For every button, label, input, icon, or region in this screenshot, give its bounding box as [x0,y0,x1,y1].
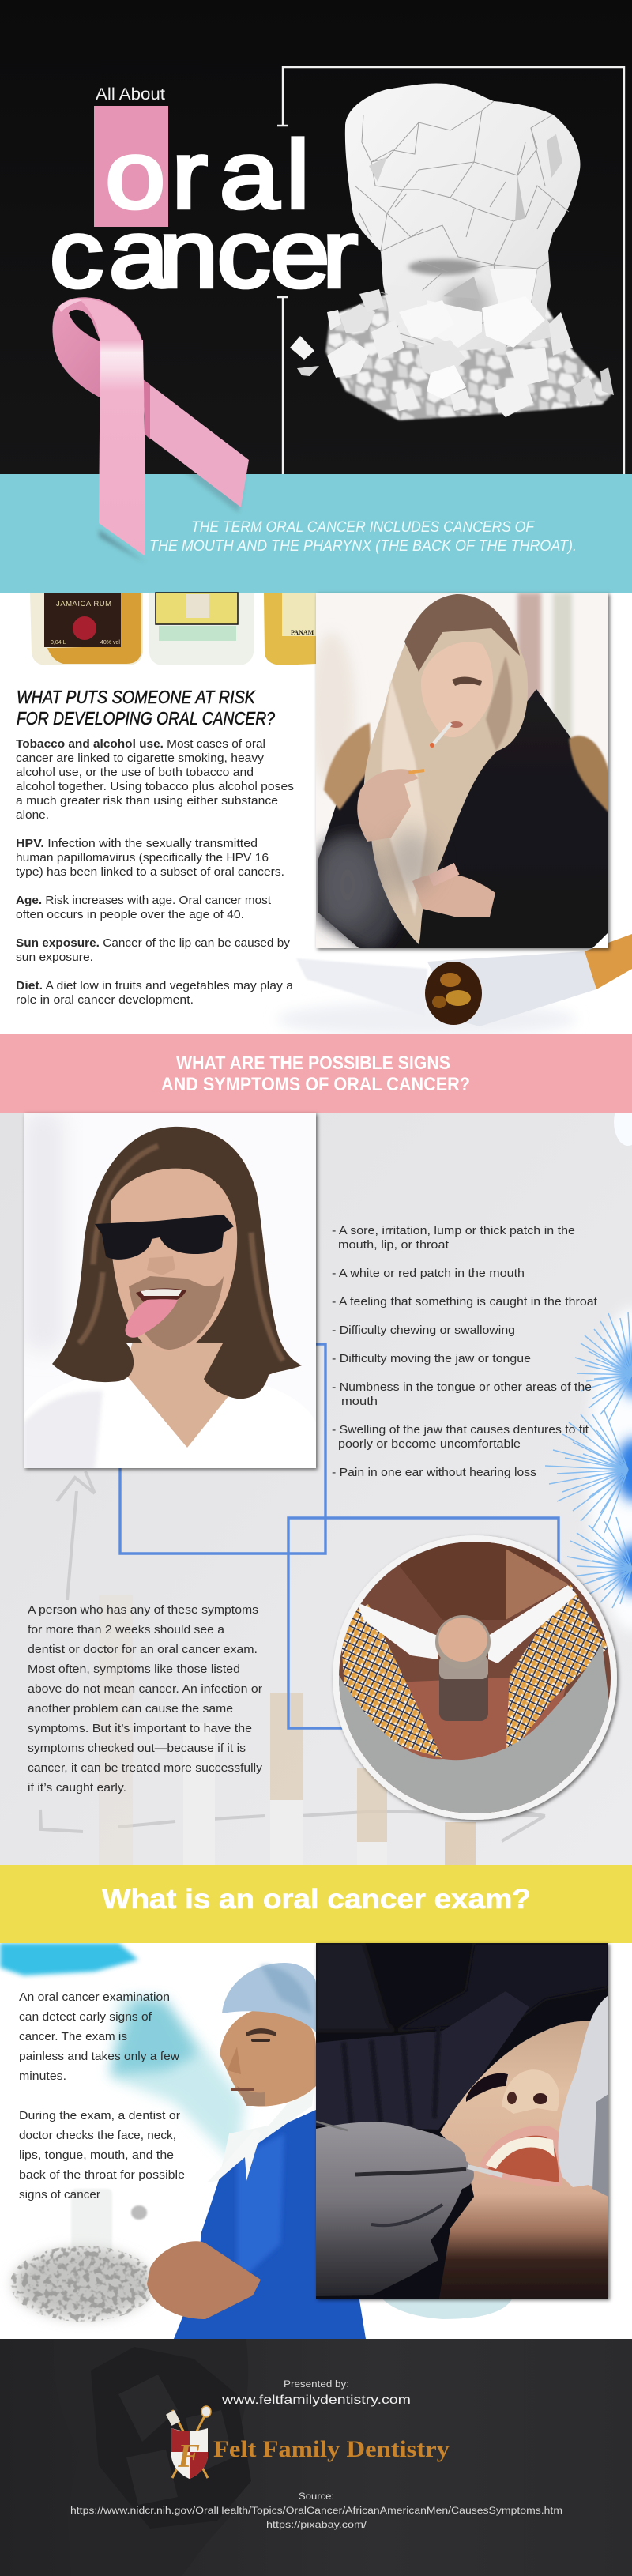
text: presented by: www.feltfamilydentistry.com [221,2393,411,2407]
image: dental examination [316,1943,608,2299]
banner: signs and symptoms: WHAT ARE THE POSSIBLE SIGNS [176,1053,450,1074]
rubble [290,289,614,417]
text: HPV: type) has been linked to a subset of oral cancers. [16,866,284,879]
panel: teal intro band [0,474,632,593]
text: exam description: An oral cancer examination [19,1991,170,2004]
text: tobacco and alcohol: a much greater risk than using either substance [16,795,278,808]
pink block behind the letter o [94,106,168,227]
image: liquor bottles: JAMAICA RUM [56,600,111,608]
title: cancer: cancer [50,201,358,307]
list: symptoms: - Swelling of the jaw that causes dentures to fit [332,1424,589,1437]
intro text: THE MOUTH AND THE PHARYNX (THE BACK OF THE THROAT). [149,537,577,555]
text: exam description: can detect early signs of [19,2011,152,2024]
banner: oral cancer exam: What is an oral cancer exam? [102,1884,531,1915]
text: exam description: lips, tongue, mouth, and the [19,2149,174,2162]
panel: hero header [0,0,632,474]
list: symptoms: - A white or red patch in the mouth [332,1267,525,1280]
text: when to see a dentist: Most often, symptoms like those listed [28,1663,240,1676]
list: symptoms: - Difficulty chewing or swallowing [332,1324,515,1337]
text: age: often occurs in people over the age of 40. [16,909,244,921]
text: presented by: Presented by: [284,2380,349,2390]
text: diet [16,980,294,1007]
mouth [480,2126,562,2186]
banner: signs and symptoms [0,1034,632,1113]
white glove [558,1995,608,2197]
face [111,1169,237,1351]
connector lines [120,1344,559,1728]
background faded tooth [101,2347,251,2529]
logo: Felt Family Dentistry shield: F [177,2439,200,2475]
hair [52,1127,302,1399]
hands [357,769,419,842]
neck [128,1343,228,1448]
panel: signs and symptoms [0,1098,632,1865]
image: broken cigarette [276,934,632,1037]
text: when to see a dentist [28,1604,263,1795]
text: sources: https://www.nidcr.nih.gov/OralHealth/Topics/OralCancer/AfricanAmericanMen/CausesSymptoms.htm [70,2506,562,2516]
image: faded gloved background and ashes [0,1943,514,2322]
text: exam description: During the exam, a dentist or [19,2110,180,2122]
icon: blue feather duster [545,1098,632,1632]
text: sun exposure [16,937,291,964]
icon: pink awareness ribbon [52,297,249,563]
panel: footer [0,2331,632,2576]
title: oral: oral [105,122,310,228]
heading: risk question: WHAT PUTS SOMEONE AT RISK [17,687,256,707]
nose [147,1256,175,1275]
intro text: THE TERM ORAL CANCER INCLUDES CANCERS OF [191,518,535,536]
text: exam description: doctor checks the face, neck, [19,2130,176,2142]
text: when to see a dentist: cancer, it can be treated more successfully [28,1762,263,1775]
text: diet: Diet. A diet low in fruits and vegetables may play a [16,980,294,992]
crown shaded facets [369,134,562,348]
text: exam description: back of the throat for possible [19,2169,185,2182]
text: tobacco and alcohol: alone. [16,809,49,822]
heading: risk question: FOR DEVELOPING ORAL CANCER? [17,708,275,729]
list: symptoms: - A sore, irritation, lump or thick patch in the [332,1225,575,1237]
text: HPV: human papillomavirus (specifically the HPV 16 [16,852,269,864]
text: exam description: signs of cancer [19,2189,100,2201]
text: when to see a dentist: symptoms. But it’s important to have the [28,1723,252,1735]
image: liquor bottles: 0,04 L [51,640,66,646]
text: when to see a dentist: another problem can cause the same [28,1703,233,1715]
text: HPV [16,838,284,879]
text: age [16,894,271,921]
face [421,642,493,737]
text: sources [70,2492,562,2530]
list: symptoms: mouth [341,1395,378,1408]
text: exam description: minutes. [19,2070,66,2083]
text: when to see a dentist: dentist or doctor for an oral cancer exam. [28,1644,258,1656]
smoke [316,842,379,928]
list: symptoms: poorly or become uncomfortable [338,1438,521,1451]
text: exam description: painless and takes only a few [19,2051,180,2063]
text: when to see a dentist: if it’s caught early. [28,1782,126,1795]
gray glove [316,2122,474,2296]
text: when to see a dentist: for more than 2 weeks should see a [28,1624,224,1636]
banner: signs and symptoms: AND SYMPTOMS OF ORAL CANCER? [161,1074,470,1095]
face [439,2021,608,2299]
text: presented by [221,2380,411,2407]
intro text [149,518,577,555]
fur trim [569,736,612,814]
logo wordmark: Felt Family Dentistry [213,2436,450,2462]
sunglasses [95,1215,234,1260]
text: sun exposure: sun exposure. [16,951,93,964]
list: symptoms: - A feeling that something is caught in the throat [332,1296,597,1309]
text: sun exposure: Sun exposure. Cancer of the lip can be caused by [16,937,291,950]
image: man sticking out tongue [24,1113,316,1470]
text: sources: Source: [299,2492,334,2502]
list: symptoms: - Numbness in the tongue or other areas of the [332,1381,592,1394]
image: neck stoma photo [332,1535,624,1825]
tooth cracks [355,101,569,348]
banner: oral cancer exam [0,1865,632,1943]
text: when to see a dentist: symptoms checked out—because if it is [28,1742,246,1755]
text: tobacco and alcohol: alcohol use, or the use of both tobacco and [16,766,254,779]
image: liquor bottles [30,593,316,665]
text: tobacco and alcohol [16,738,294,822]
image: doctor in blue scrubs [147,1963,366,2339]
text: tobacco and alcohol: cancer are linked to cigarette smoking, heavy [16,752,265,765]
eye and nose [466,2073,508,2102]
hair [364,594,528,944]
text: sources: https://pixabay.com/ [266,2521,367,2530]
text: exam description: cancer. The exam is [19,2031,127,2043]
text: exam description [19,1991,185,2201]
text: tobacco and alcohol: Tobacco and alcohol use. Most cases of oral [16,738,265,751]
text: diet: role in oral cancer development. [16,994,194,1007]
shirt [24,1371,316,1470]
list: symptoms: - Difficulty moving the jaw or tongue [332,1353,531,1365]
text: HPV: HPV. Infection with the sexually transmitted [16,838,258,850]
image: woman lighting a cigarette [308,593,612,952]
text: age: Age. Risk increases with age. Oral cancer most [16,894,271,907]
icon: crumbling tooth [290,83,614,420]
list: symptoms [332,1225,597,1479]
image: liquor bottles: PANAM [291,629,314,636]
text: when to see a dentist: above do not mean cancer. An infection or [28,1683,262,1696]
background sketch: chart with faded cigarettes [40,1471,545,1865]
panel: exam [0,1943,632,2339]
jacket [318,689,612,952]
text: when to see a dentist: A person who has any of these symptoms [28,1604,258,1617]
logo: Felt Family Dentistry shield [166,2406,211,2479]
text: All About: All About [96,85,165,104]
image: liquor bottles: 40% vol [100,640,120,646]
clothing folds [316,1943,395,2031]
mouth and tongue [136,1288,186,1302]
text: tobacco and alcohol: alcohol together. Using tobacco plus alcohol poses [16,781,294,793]
cigarette [434,723,451,744]
bracket frame around tooth [277,67,624,474]
panel: risk factors [0,593,632,1037]
heading: risk question [17,687,275,729]
list: symptoms: mouth, lip, or throat [338,1239,449,1252]
list: symptoms: - Pain in one ear without hearing loss [332,1467,536,1479]
